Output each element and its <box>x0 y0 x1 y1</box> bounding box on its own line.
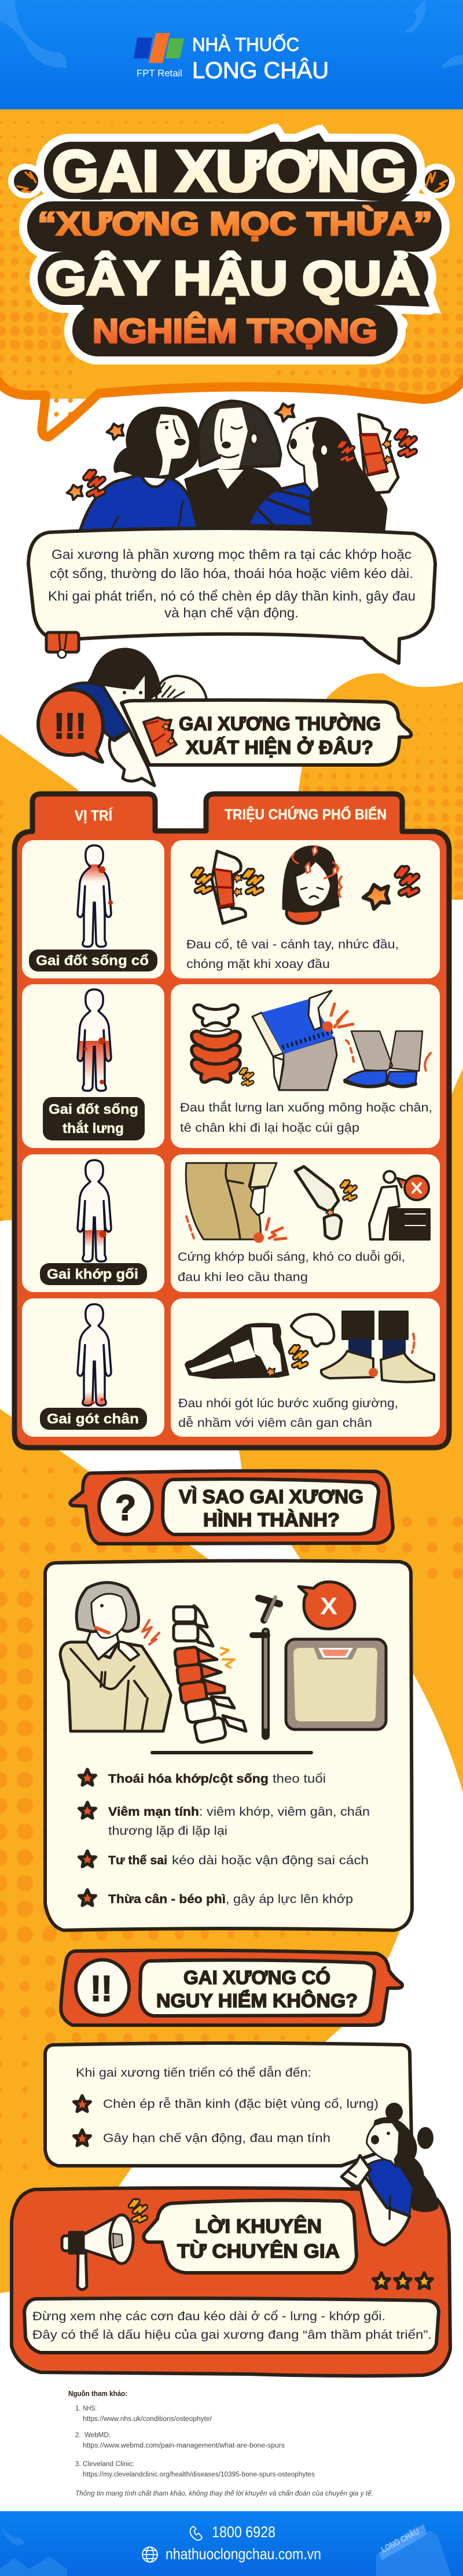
right spark <box>422 167 452 196</box>
logo: FPT Retail <box>134 34 183 79</box>
reference 3: 3. <box>75 2461 81 2468</box>
rating stars <box>373 2273 432 2288</box>
section heading: is it dangerous <box>61 1951 402 2025</box>
cause 4: , gây áp lực lên khớp <box>226 1893 353 1906</box>
symptom text: Đau cổ, tê vai - cánh tay, nhức đầu, <box>186 938 399 951</box>
illustration: spine side view <box>174 1606 246 1743</box>
heading text box <box>140 1960 374 2016</box>
label: lower back: Gai đốt sống <box>49 1102 138 1117</box>
label: lower back: thắt lưng <box>63 1120 124 1136</box>
reference 3 <box>75 2461 315 2478</box>
danger 1: Chèn ép rễ thần kinh (đặc biệt vùng cổ, lưng) <box>103 2097 379 2111</box>
reference 1: NHS: <box>83 2405 97 2412</box>
heading text box: HÌNH THÀNH? <box>203 1509 340 1530</box>
illustration: surprised girl leaning <box>341 2103 437 2245</box>
cause 2: : viêm khớp, viêm gân, chấn <box>199 1805 370 1819</box>
danger 2 <box>74 2130 330 2146</box>
symptom text: chóng mặt khi xoay đầu <box>186 958 330 971</box>
phone <box>190 2523 275 2541</box>
title block <box>11 123 452 356</box>
illustration: foot x-ray <box>185 1323 306 1379</box>
illustration: legs and shoes <box>344 1031 431 1087</box>
disclaimer: Thông tin mang tính chất tham khảo, không thay thế lời khuyên và chẩn đoán của chuyên gia y tế. <box>75 2490 373 2497</box>
illustration: dizzy girl <box>284 846 341 923</box>
symptom text <box>180 1101 432 1135</box>
advice text card: Đừng xem nhẹ các cơn đau kéo dài ở cổ - lưng - khớp gối. <box>32 2310 385 2323</box>
header band <box>0 0 463 109</box>
cause 1: Thoái hóa khớp/cột sống <box>108 1772 269 1786</box>
icon: exclamation <box>76 1960 129 2015</box>
heading bubble <box>122 700 411 765</box>
dot rows beneath cards <box>43 1926 361 2043</box>
cause 2: thương lặp đi lặp lại <box>108 1824 227 1838</box>
cause 1: theo tuổi <box>273 1772 326 1786</box>
illustration: weighing scale <box>286 1639 386 1729</box>
heading text box: VÌ SAO GAI XƯƠNG <box>179 1486 363 1507</box>
references heading: Nguồn tham khảo: <box>68 2390 127 2398</box>
icon: question: ? <box>115 1488 136 1528</box>
intro text: và hạn chế vận động. <box>164 605 299 620</box>
cause 3: kéo dài hoặc vận động sai cách <box>172 1854 369 1867</box>
reference 1: 1. <box>75 2405 81 2412</box>
label: lower back <box>43 1097 145 1140</box>
body figure: neck <box>77 845 113 947</box>
icon: burst and star <box>363 869 417 909</box>
heading bubble <box>144 2200 357 2273</box>
logo: FPT Retail: FPT Retail <box>137 68 182 79</box>
stars <box>67 404 294 500</box>
label: neck: Gai đốt sống cổ <box>36 953 149 969</box>
heading text: XUẤT HIỆN Ở ĐÂU? <box>186 737 373 758</box>
woman 1 <box>80 408 199 531</box>
illustration: knee pain legs <box>186 1163 286 1243</box>
brand name <box>192 34 329 83</box>
symptom text: Đau nhói gót lúc bước xuống giường, <box>178 1397 398 1410</box>
tab label: position: VỊ TRÍ <box>75 807 113 824</box>
symptom text: Cứng khớp buổi sáng, khó co duỗi gối, <box>178 1250 405 1264</box>
symptom text: đau khi leo cầu thang <box>178 1271 308 1284</box>
reference 2: 2. <box>75 2432 81 2439</box>
body figure: heel <box>77 1304 112 1407</box>
title line 1: GAI XƯƠNG <box>52 139 407 204</box>
symptom table <box>14 794 449 1448</box>
panel: expert advice <box>12 2188 450 2376</box>
background: white speech bubble orange top <box>0 109 463 441</box>
binder clip <box>46 632 79 658</box>
illustration: lumbar vertebrae <box>192 1005 252 1084</box>
speech bubble: exclamation: !!! <box>54 706 86 746</box>
intro text: cột sống, thường do lão hóa, thoái hóa hoặc viêm kéo dài. <box>50 566 413 581</box>
icon: no bubble: X <box>320 1592 337 1620</box>
illustration: neck spine <box>194 851 261 923</box>
intro speech bubble <box>28 528 435 663</box>
tab label: symptoms: TRIỆU CHỨNG PHỔ BIẾN <box>225 805 387 823</box>
panel: dangers <box>45 2043 411 2166</box>
advice text card <box>24 2298 439 2353</box>
illustration: stairs person <box>369 1171 429 1239</box>
label: knee <box>40 1263 147 1285</box>
heading text box <box>163 1479 379 1534</box>
cause 4: Thừa cân - béo phì <box>108 1893 226 1906</box>
background: yellow blobs <box>0 674 463 2293</box>
intro text: Khi gai phát triển, nó có thể chèn ép dây thần kinh, gây đau <box>48 588 416 603</box>
illustration: sneakers <box>321 1312 434 1382</box>
reference 3: https://my.clevelandclinic.org/health/diseases/10395-bone-spurs-osteophytes <box>83 2471 315 2478</box>
reference 1: https://www.nhs.uk/conditions/osteophyte/ <box>83 2416 212 2423</box>
cause 3: Tư thế sai <box>108 1854 167 1867</box>
icon: no bubble <box>299 1582 355 1629</box>
advice text card: Đây có thể là dấu hiệu của gai xương đang “âm thầm phát triển”. <box>32 2328 432 2342</box>
symptom text <box>178 1250 405 1284</box>
danger intro text: Khi gai xương tiến triển có thể dẫn đến: <box>76 2066 311 2080</box>
illustration: knee joint bones <box>295 1166 355 1239</box>
table frame and tabs <box>14 794 449 1448</box>
row 3: knee <box>22 1154 440 1292</box>
girl pointing <box>63 649 207 786</box>
intro text <box>48 547 416 620</box>
icon: question <box>99 1479 152 1534</box>
phone: 1800 6928 <box>212 2523 275 2541</box>
illustration: old woman with neck pain <box>60 1583 171 1731</box>
reference 2: WebMD: <box>84 2432 111 2439</box>
pain bursts <box>86 432 414 495</box>
heading text box: GAI XƯƠNG CÓ <box>183 1967 330 1988</box>
section heading: where spurs appear <box>38 649 411 786</box>
cause 4 <box>79 1890 353 1906</box>
title line 3: GÂY HẬU QUẢ <box>45 251 420 305</box>
spine with pain <box>359 414 398 493</box>
row 2: lower back <box>22 984 440 1148</box>
website: nhathuoclongchau.com.vn <box>166 2545 321 2563</box>
title line 4: NGHIÊM TRỌNG <box>93 312 377 350</box>
icon: exclamation: !! <box>90 1969 112 2009</box>
reference 1 <box>75 2405 212 2423</box>
label: heel: Gai gót chân <box>47 1411 139 1427</box>
symptom text <box>186 938 399 971</box>
woman 2 <box>186 401 282 529</box>
divider bar <box>150 1751 313 1754</box>
cause 2 <box>79 1802 370 1838</box>
symptom text: tê chân khi đi lại hoặc cúi gập <box>180 1121 359 1135</box>
heading text <box>179 713 381 758</box>
left spark <box>11 167 41 196</box>
danger 2: Gây hạn chế vận động, đau mạn tính <box>103 2132 330 2145</box>
cause 2: Viêm mạn tính <box>108 1805 199 1819</box>
symptom text <box>178 1397 398 1430</box>
references <box>68 2390 373 2497</box>
heading text box: NGUY HIỂM KHÔNG? <box>156 1989 358 2011</box>
reference 2: https://www.webmd.com/pain-management/what-are-bone-spurs <box>83 2442 285 2449</box>
illustration: back pain person <box>252 991 353 1090</box>
body figure: knee <box>77 1160 112 1261</box>
heading text: GAI XƯƠNG THƯỜNG <box>179 713 381 734</box>
icon: megaphone <box>62 2201 145 2290</box>
icon: spine <box>144 717 177 756</box>
cause 3 <box>79 1851 369 1867</box>
body figure: lower back <box>77 989 112 1091</box>
label: heel <box>40 1408 147 1430</box>
row 1: neck <box>22 840 440 978</box>
intro text: Gai xương là phần xương mọc thêm ra tại các khớp hoặc <box>52 547 411 562</box>
illustration: heel bone <box>291 1314 334 1346</box>
illustration: crutch <box>252 1597 280 1736</box>
storefront watermark: LONG CHÂU <box>379 2526 421 2555</box>
danger 1 <box>74 2096 379 2111</box>
title line 2: “XƯƠNG MỌC THỪA” <box>38 205 432 242</box>
heading bubble: LỜI KHUYÊN <box>195 2216 322 2238</box>
brand name: LONG CHÂU <box>192 57 329 83</box>
label: knee: Gai khớp gối <box>47 1267 138 1282</box>
heading bubble: TỪ CHUYÊN GIA <box>177 2240 340 2262</box>
footer band <box>0 2511 463 2576</box>
storefront watermark <box>376 2524 451 2576</box>
symptom text: Đau thắt lưng lan xuống mông hoặc chân, <box>180 1101 432 1114</box>
row 4: heel <box>22 1298 440 1437</box>
woman 3 <box>248 418 386 530</box>
label: neck <box>29 950 157 971</box>
illustration: three women <box>67 401 414 531</box>
brand name: NHÀ THUỐC <box>192 34 299 55</box>
reference 3: Cleveland Clinic: <box>83 2461 134 2468</box>
reference 2 <box>75 2432 285 2449</box>
symptom text: dễ nhầm với viêm cân gan chân <box>178 1416 372 1430</box>
speech bubble: exclamation <box>38 690 103 762</box>
cause 1 <box>79 1769 326 1786</box>
panel: causes <box>45 1561 412 1930</box>
section heading: why spurs form <box>70 1471 393 1544</box>
